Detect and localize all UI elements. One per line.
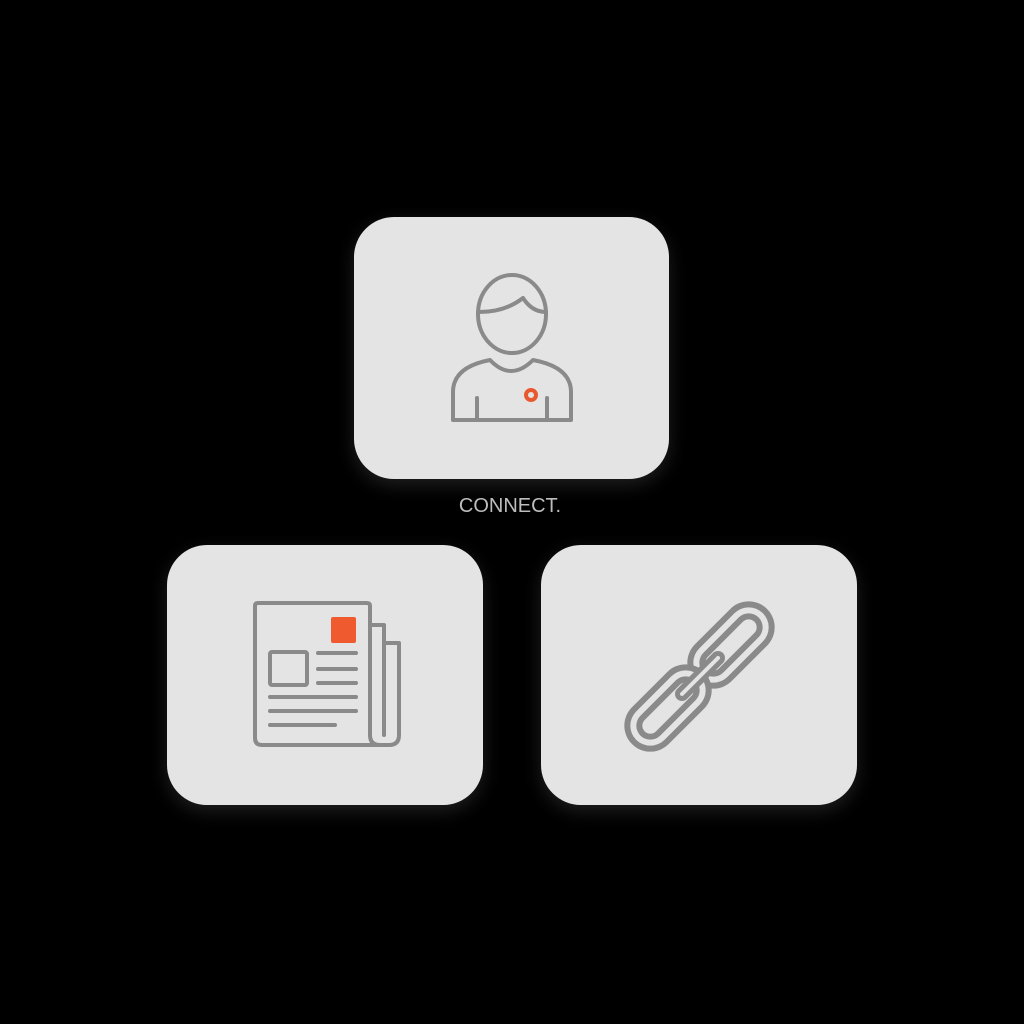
card: link [541, 545, 857, 805]
icon: person [451, 273, 573, 422]
label: CONNECT.: CONNECT. [459, 495, 561, 517]
card: person [354, 217, 669, 479]
card: newspaper [167, 545, 483, 805]
icon: chain [624, 601, 775, 752]
icon: newspaper [253, 601, 401, 747]
